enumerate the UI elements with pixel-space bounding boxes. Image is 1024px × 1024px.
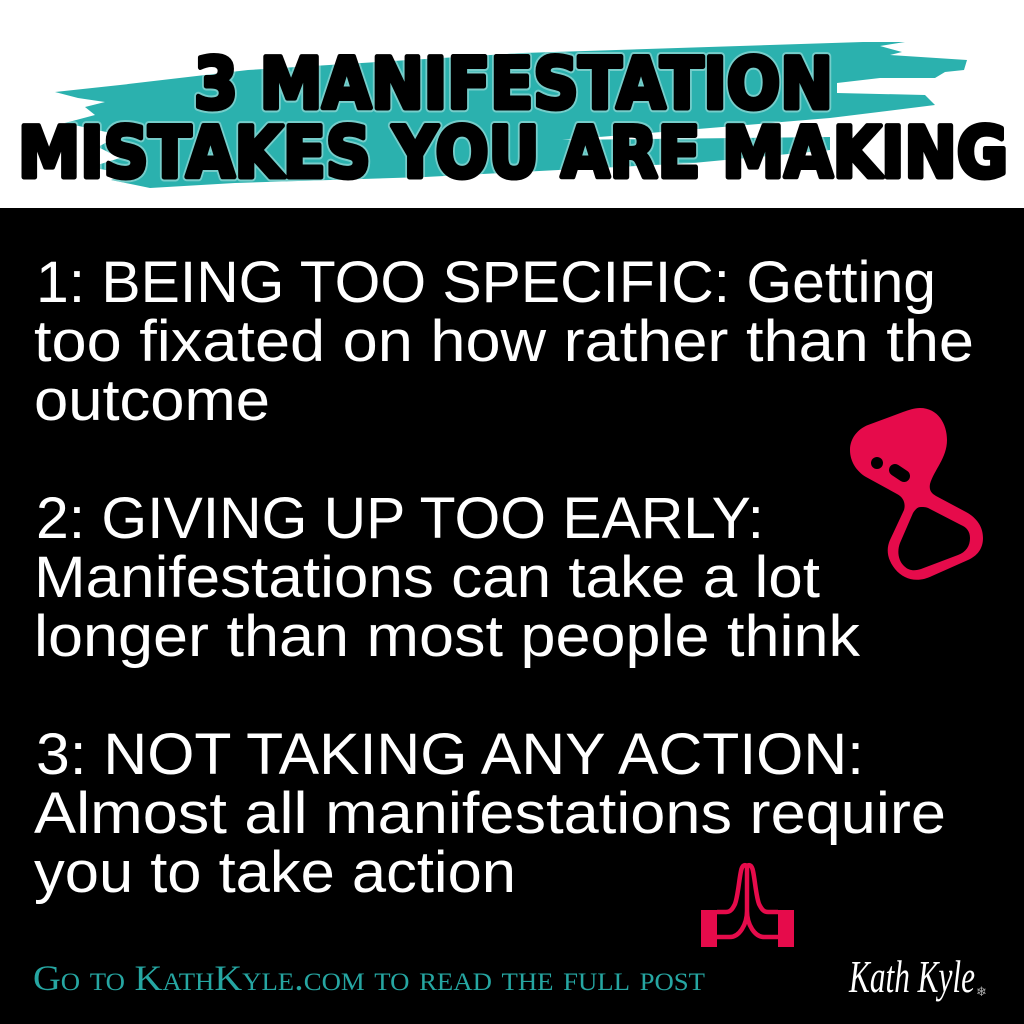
text block: mistake 2: longer than most people think [34, 604, 861, 669]
title: 3 MANIFESTATION [194, 43, 833, 125]
text block: mistake 1: too fixated on how rather than the [34, 309, 974, 374]
title: 3 MANIFESTATION [194, 43, 833, 125]
text block: mistake 2: Manifestations can take a lot [34, 545, 820, 610]
footer call to action: Go to KathKyle.com to read the full post [33, 958, 705, 998]
teal brush stroke [55, 42, 967, 188]
text block: mistake 1 [34, 250, 974, 433]
panel: black content background [0, 208, 1024, 1024]
text block: mistake 3: 3: NOT TAKING ANY ACTION: [36, 722, 864, 787]
text block: mistake 2: 2: GIVING UP TOO EARLY: [36, 486, 764, 551]
text block: mistake 2 [34, 486, 861, 669]
signature logo: ❄ [976, 985, 987, 1000]
icon: praying hands [701, 865, 794, 947]
text block: mistake 3 [34, 722, 946, 905]
title [22, 51, 1006, 182]
text block: mistake 3: you to take action [34, 840, 516, 905]
text block: mistake 3: Almost all manifestations require [34, 781, 946, 846]
icon: red hourglass shape [850, 408, 983, 580]
text block: mistake 1: outcome [34, 368, 270, 433]
text block: mistake 1: 1: BEING TOO SPECIFIC: Getting [36, 250, 936, 315]
